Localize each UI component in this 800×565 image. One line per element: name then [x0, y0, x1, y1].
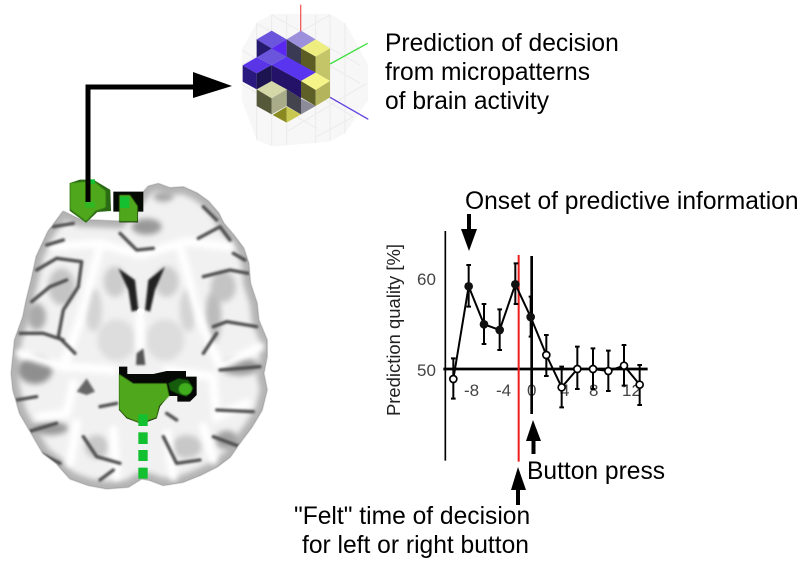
deep structures — [18, 192, 260, 458]
activation: left frontal — [70, 179, 111, 222]
filled markers — [464, 280, 535, 334]
y axis label: Prediction quality [%] — [384, 244, 404, 416]
tick labels: 60 — [417, 270, 436, 289]
label: button press: Button press — [527, 458, 665, 485]
cortical folds — [17, 207, 260, 480]
heading: prediction of decision: from micropatterns — [385, 59, 590, 86]
tick labels: 0 — [527, 381, 536, 400]
reference lines: felt decision and button press — [516, 255, 522, 462]
tick labels: -8 — [464, 381, 479, 400]
heading: prediction of decision: Prediction of decision — [385, 30, 619, 57]
white matter tracts — [20, 242, 260, 477]
tick labels: 4 — [560, 381, 569, 400]
ventricles and insula — [77, 267, 165, 395]
brain tissue — [12, 184, 267, 488]
activation: posterior — [119, 367, 197, 424]
error bars — [451, 263, 642, 407]
tick labels: 12 — [622, 381, 641, 400]
axis lines — [301, 5, 368, 119]
tick labels — [417, 270, 641, 400]
open markers — [450, 351, 643, 391]
voxel micropattern cube — [240, 5, 370, 148]
dashed green marker — [138, 414, 148, 479]
heading: onset of predictive information: Onset of predictive information — [465, 188, 799, 215]
tick labels: 50 — [417, 361, 436, 380]
arrow: onset — [461, 214, 477, 251]
arrow: felt time — [511, 467, 526, 505]
tick labels: 8 — [589, 381, 598, 400]
label: felt time of decision: "Felt" time of decision — [294, 503, 530, 530]
arrow: button press — [526, 420, 541, 454]
label: felt time of decision: for left or right button — [302, 532, 529, 559]
tick labels: -4 — [496, 381, 511, 400]
line chart: prediction quality — [384, 231, 648, 462]
cortex ring — [12, 184, 267, 488]
voxels — [243, 31, 330, 123]
brain scan — [12, 179, 267, 488]
data line — [453, 284, 640, 387]
arrow: brain to voxel pattern — [88, 72, 232, 202]
background hex grid — [240, 13, 370, 148]
axes — [443, 231, 648, 461]
heading: prediction of decision: of brain activity — [385, 88, 550, 115]
activation: right frontal — [113, 192, 143, 222]
